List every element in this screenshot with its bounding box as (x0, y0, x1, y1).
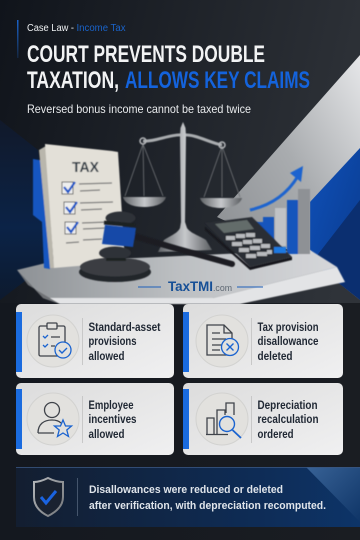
card text: allowed (88, 351, 124, 363)
header (17, 20, 310, 116)
title: COURT PREVENTS DOUBLE (27, 41, 265, 68)
icon: clipboard check (27, 315, 79, 367)
panel: depreciation recalculation (183, 383, 343, 455)
screen (215, 220, 254, 233)
card text: allowed (88, 429, 124, 441)
panel: employee incentives (16, 383, 174, 455)
shelf (17, 250, 345, 304)
category label (27, 23, 126, 34)
brand: TaxTMI.com: TaxTMI (168, 279, 213, 294)
accent bar (17, 20, 18, 58)
brand: TaxTMI.com: .com (213, 283, 232, 294)
icon: person with star (27, 393, 79, 445)
card text: provisions (88, 336, 136, 348)
icon: chart with magnifier (196, 393, 248, 445)
category label: Income Tax (76, 23, 126, 34)
card text: Depreciation (258, 400, 318, 412)
card text: deleted (258, 351, 292, 363)
summary text: Disallowances were reduced or deleted (89, 484, 283, 496)
handle (134, 236, 232, 264)
icon: calculator (205, 217, 292, 270)
card text: Tax provision (258, 322, 318, 334)
title: TAXATION, (27, 67, 119, 94)
card text (88, 322, 161, 363)
card text: incentives (88, 414, 136, 426)
pans (123, 197, 166, 207)
card text: disallowance (258, 336, 318, 348)
card text (88, 400, 136, 441)
heading on page: TAX (72, 159, 99, 176)
icon: balance scale (123, 122, 242, 252)
checklist (62, 182, 113, 243)
card text: Employee (88, 400, 134, 412)
page (45, 144, 125, 268)
icon: gavel (79, 212, 232, 282)
head (106, 212, 136, 224)
brand: TaxTMI.com (138, 279, 263, 294)
keys (226, 233, 272, 258)
back page (39, 146, 54, 268)
icon: tax document (33, 144, 125, 269)
blue folder (33, 159, 50, 269)
pillar (158, 122, 212, 252)
sound block (79, 262, 151, 282)
icon: document with cross (196, 315, 248, 367)
card text: ordered (258, 429, 294, 441)
title (27, 41, 310, 94)
subtitle: Reversed bonus income cannot be taxed twice (27, 102, 251, 116)
panel: tax provision disallowance (183, 304, 343, 378)
card text: Standard-asset (88, 322, 161, 334)
beam (143, 135, 222, 145)
summary text (89, 484, 326, 512)
bar chart (250, 166, 310, 254)
category label: Case Law - (27, 23, 74, 34)
summary text: after verification, with depreciation recomputed. (89, 500, 326, 512)
icon: shield check (34, 478, 63, 516)
card text (258, 322, 318, 363)
growth arrow (250, 166, 303, 210)
panel: summary banner (16, 467, 360, 527)
chains (125, 144, 240, 197)
card text (258, 400, 318, 441)
card text: recalculation (258, 414, 318, 426)
panel: standard-asset provisions (16, 304, 174, 378)
